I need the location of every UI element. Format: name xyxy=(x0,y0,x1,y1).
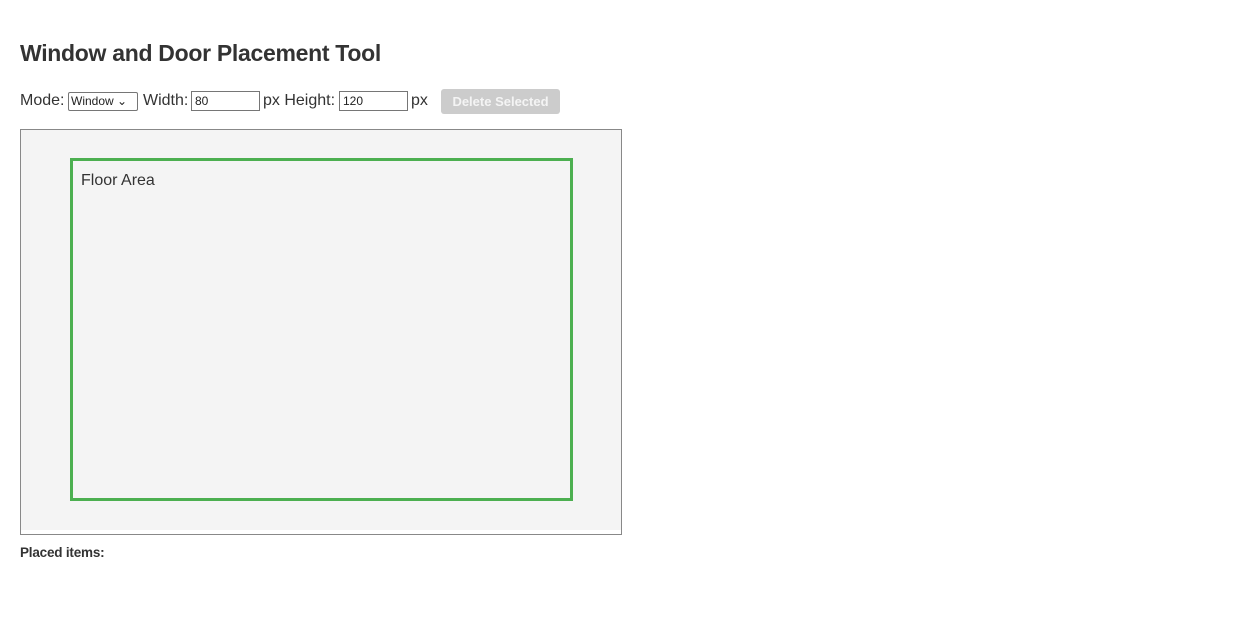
mode select: Window ⌄ xyxy=(71,94,127,108)
height label: px Height: xyxy=(263,92,335,109)
height input xyxy=(339,91,408,111)
delete button xyxy=(441,89,560,114)
title: Window and Door Placement Tool xyxy=(20,40,381,66)
height input: 120 xyxy=(343,94,363,108)
floor area label: Floor Area xyxy=(81,172,155,189)
mode select xyxy=(68,92,138,111)
width label: Width: xyxy=(143,92,188,109)
width input xyxy=(191,91,260,111)
floor area xyxy=(70,158,573,501)
placed items heading: Placed items: xyxy=(20,545,104,560)
mode label: Mode: xyxy=(20,92,64,109)
canvas panel xyxy=(20,129,622,535)
width input: 80 xyxy=(195,94,208,108)
delete button: Delete Selected xyxy=(452,94,549,109)
controls row xyxy=(20,89,560,114)
px label: px xyxy=(411,92,428,109)
